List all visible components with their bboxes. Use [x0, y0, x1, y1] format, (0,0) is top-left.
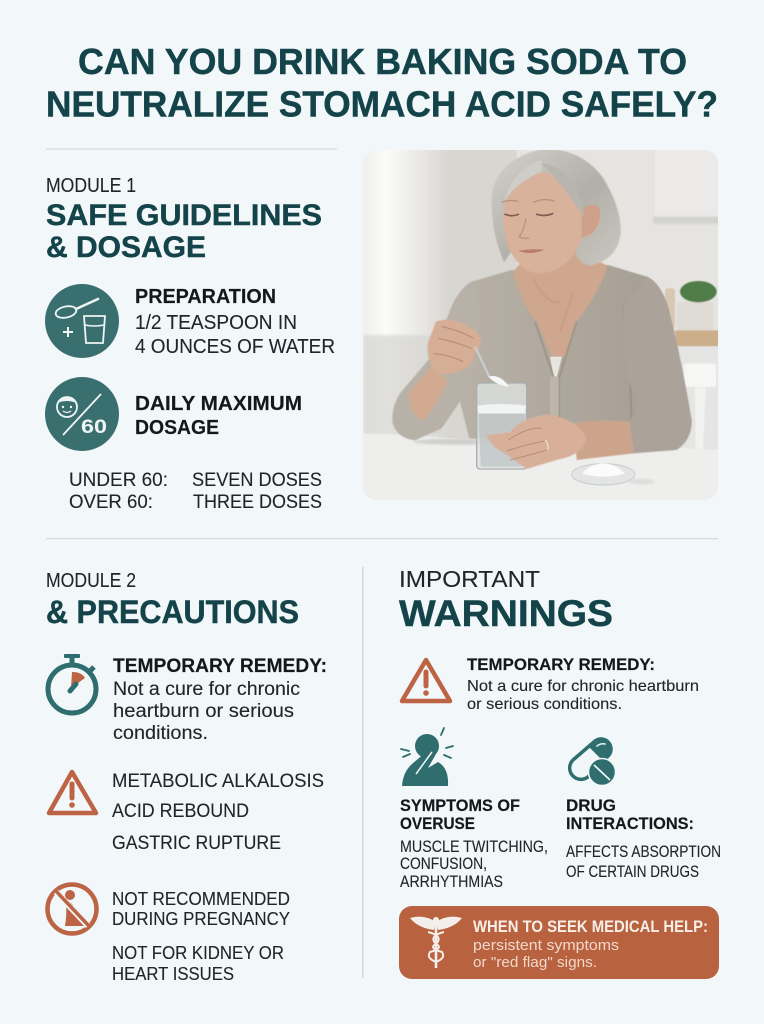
pregnancy and organ warnings: NOT FOR KIDNEY OR: [112, 942, 284, 963]
dose table: SEVEN DOSES: [192, 469, 322, 491]
drug interactions text: DRUG: [566, 797, 616, 815]
risks list: METABOLIC ALKALOSIS: [112, 770, 324, 792]
risks list: [112, 770, 324, 854]
daily maximum dosage heading: DOSAGE: [135, 417, 219, 439]
left arm sleeve: [392, 282, 480, 440]
heading: precautions: & PRECAUTIONS: [46, 594, 299, 630]
torso: [450, 264, 692, 439]
heading: safe guidelines and dosage: SAFE GUIDELINES: [46, 199, 322, 232]
icon: no pregnancy: [48, 884, 96, 934]
title: NEUTRALIZE STOMACH ACID SAFELY?: [46, 84, 718, 124]
icon: capsule and tablet: [570, 739, 616, 786]
drug interactions text: INTERACTIONS:: [566, 815, 694, 833]
icon: warning triangle: [49, 772, 96, 813]
module 2 label: MODULE 2: [46, 570, 136, 592]
photo: older woman stirring baking soda into water: [360, 145, 724, 505]
symptoms of overuse text: OVERUSE: [400, 815, 475, 833]
icon: caduceus: [410, 917, 462, 968]
symptoms of overuse text: MUSCLE TWITCHING,: [400, 838, 548, 856]
icon: face over 60: 60: [81, 417, 107, 438]
preparation text: [135, 286, 335, 358]
heading: warnings: WARNINGS: [399, 593, 613, 634]
dose table: THREE DOSES: [193, 491, 322, 513]
title: CAN YOU DRINK BAKING SODA TO: [78, 41, 687, 82]
callout: when to seek medical help: persistent symptoms: [473, 937, 619, 954]
right hand and forearm: [573, 420, 634, 460]
temporary remedy text: Not a cure for chronic heartburn: [467, 678, 699, 695]
temporary remedy text: TEMPORARY REMEDY:: [113, 656, 327, 677]
glass: [477, 383, 527, 469]
callout: when to seek medical help: [399, 906, 719, 979]
pregnancy and organ warnings: DURING PREGNANCY: [112, 908, 290, 929]
risks list: GASTRIC RUPTURE: [112, 832, 281, 854]
callout: when to seek medical help: or "red flag" signs.: [473, 954, 597, 971]
drug interactions text: OF CERTAIN DRUGS: [566, 863, 699, 881]
heading: safe guidelines and dosage: [46, 199, 322, 264]
icon: person with symptoms: [401, 728, 453, 786]
icon: warning triangle: [402, 660, 450, 701]
icon: face over 60: [45, 377, 119, 451]
left forearm and hand: [408, 367, 447, 420]
symptoms of overuse text: [400, 797, 548, 891]
preparation text: 1/2 TEASPOON IN: [135, 312, 297, 334]
saucer: [628, 479, 655, 484]
temporary remedy text: conditions.: [113, 723, 208, 744]
temporary remedy text: heartburn or serious: [113, 701, 294, 722]
callout: when to seek medical help: WHEN TO SEEK MEDICAL HELP:: [473, 918, 708, 936]
right arm sleeve: [623, 277, 692, 453]
temporary remedy text: Not a cure for chronic: [113, 679, 300, 700]
icon: stopwatch: [48, 654, 96, 713]
temporary remedy text: or serious conditions.: [467, 696, 622, 713]
risks list: ACID REBOUND: [112, 800, 249, 822]
daily maximum dosage heading: [135, 393, 302, 439]
neck and chest: [513, 252, 608, 357]
symptoms of overuse text: CONFUSION,: [400, 855, 487, 873]
temporary remedy text: [113, 656, 327, 744]
symptoms of overuse text: ARRHYTHMIAS: [400, 873, 503, 891]
panel: important warnings: [399, 566, 721, 979]
dose table: UNDER 60:: [69, 469, 168, 491]
title: [46, 41, 718, 124]
table: [360, 433, 724, 505]
temporary remedy text: [467, 655, 699, 713]
drug interactions text: [566, 797, 721, 881]
panel: module 2 precautions: [46, 570, 327, 984]
dose table: [69, 469, 322, 513]
preparation text: PREPARATION: [135, 286, 276, 308]
pregnancy and organ warnings: [112, 888, 290, 984]
daily maximum dosage heading: DAILY MAXIMUM: [135, 393, 302, 415]
pregnancy and organ warnings: NOT RECOMMENDED: [112, 888, 290, 909]
dose table: OVER 60:: [69, 491, 153, 513]
symptoms of overuse text: SYMPTOMS OF: [400, 797, 520, 815]
kitchen shelf, plant and chair: [664, 280, 718, 449]
temporary remedy text: TEMPORARY REMEDY:: [467, 655, 655, 674]
important label: IMPORTANT: [399, 566, 540, 592]
heading: safe guidelines and dosage: & DOSAGE: [46, 231, 206, 264]
hair and face: [492, 149, 621, 266]
icon: spoon and glass: [45, 284, 119, 358]
drug interactions text: AFFECTS ABSORPTION: [566, 843, 721, 861]
panel: module 1 safe guidelines and dosage: [45, 175, 335, 513]
preparation text: 4 OUNCES OF WATER: [135, 336, 335, 358]
pregnancy and organ warnings: HEART ISSUES: [112, 963, 234, 984]
module 1 label: MODULE 1: [46, 175, 136, 197]
